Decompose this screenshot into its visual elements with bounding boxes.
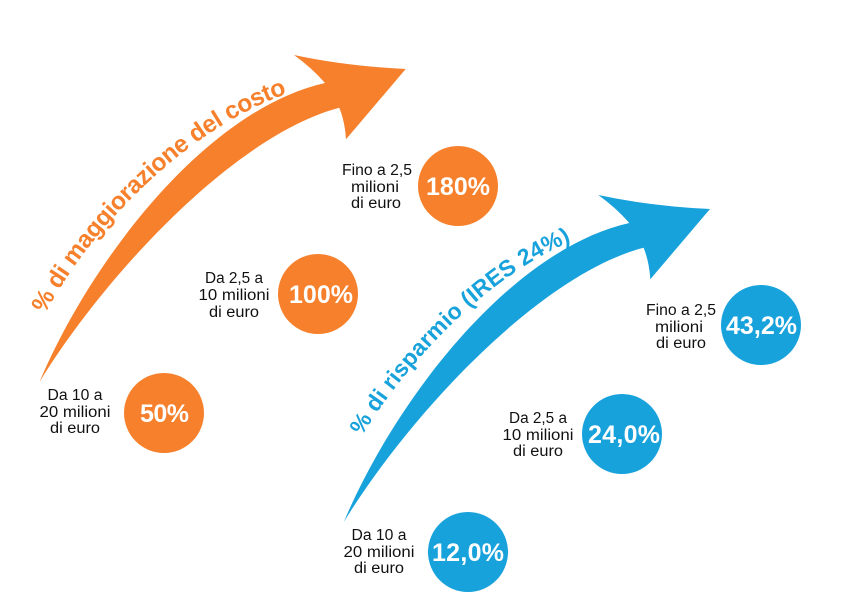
circle: 50%: 50% bbox=[140, 400, 189, 428]
label: fino a 2,5 milioni di euro (orange): Fino a 2,5 bbox=[342, 162, 412, 179]
label: da 2,5 a 10 milioni di euro (orange): 10 milioni bbox=[198, 287, 270, 304]
label: da 10 a 20 milioni di euro (blue) bbox=[344, 527, 414, 577]
label: da 2,5 a 10 milioni di euro (blue) bbox=[502, 410, 574, 460]
label: da 10 a 20 milioni di euro (orange): Da 10 a bbox=[48, 387, 103, 404]
arrow: orange cost arrow bbox=[40, 55, 406, 382]
label: da 10 a 20 milioni di euro (orange): di euro bbox=[50, 420, 100, 437]
circle: 12,0%: 12,0% bbox=[432, 539, 504, 567]
label: fino a 2,5 milioni di euro (blue) bbox=[646, 302, 716, 352]
circle: 180% bbox=[418, 146, 498, 226]
label: fino a 2,5 milioni di euro (blue): milioni bbox=[655, 319, 703, 336]
label: da 2,5 a 10 milioni di euro (orange) bbox=[198, 270, 270, 321]
label: da 10 a 20 milioni di euro (blue): Da 10 a bbox=[352, 527, 407, 544]
label: da 2,5 a 10 milioni di euro (blue): di euro bbox=[513, 443, 563, 460]
label: fino a 2,5 milioni di euro (orange): milioni bbox=[351, 179, 399, 196]
label: da 2,5 a 10 milioni di euro (orange): di euro bbox=[209, 304, 259, 321]
circle: 100%: 100% bbox=[289, 281, 353, 309]
label: da 10 a 20 milioni di euro (blue): di euro bbox=[354, 560, 404, 577]
label: da 10 a 20 milioni di euro (orange) bbox=[40, 387, 110, 437]
label: fino a 2,5 milioni di euro (orange): di euro bbox=[351, 195, 401, 212]
circle: 24,0% bbox=[582, 394, 662, 474]
circle: 43,2% bbox=[721, 285, 801, 365]
label: da 2,5 a 10 milioni di euro (blue): Da 2,5 a bbox=[509, 410, 567, 427]
label: da 10 a 20 milioni di euro (orange): 20 milioni bbox=[40, 404, 110, 421]
circle: 100% bbox=[278, 254, 358, 334]
label: da 2,5 a 10 milioni di euro (orange): Da 2,5 a bbox=[205, 270, 263, 287]
circle: 50% bbox=[124, 373, 204, 453]
label: da 2,5 a 10 milioni di euro (blue): 10 milioni bbox=[502, 427, 574, 444]
circle: 24,0%: 24,0% bbox=[588, 421, 660, 449]
label: fino a 2,5 milioni di euro (blue): Fino a 2,5 bbox=[646, 302, 716, 319]
heading: % di maggiorazione del costo: % di maggiorazione del costo bbox=[32, 83, 284, 310]
circle: 180%: 180% bbox=[426, 173, 490, 201]
label: fino a 2,5 milioni di euro (orange) bbox=[342, 162, 412, 212]
circle: 12,0% bbox=[428, 512, 508, 592]
label: da 10 a 20 milioni di euro (blue): 20 milioni bbox=[344, 544, 414, 561]
label: fino a 2,5 milioni di euro (blue): di euro bbox=[656, 335, 706, 352]
circle: 43,2%: 43,2% bbox=[726, 312, 797, 340]
arrow: blue savings arrow bbox=[344, 195, 710, 522]
heading: % di risparmio (IRES 24%): % di risparmio (IRES 24%) bbox=[350, 228, 570, 433]
